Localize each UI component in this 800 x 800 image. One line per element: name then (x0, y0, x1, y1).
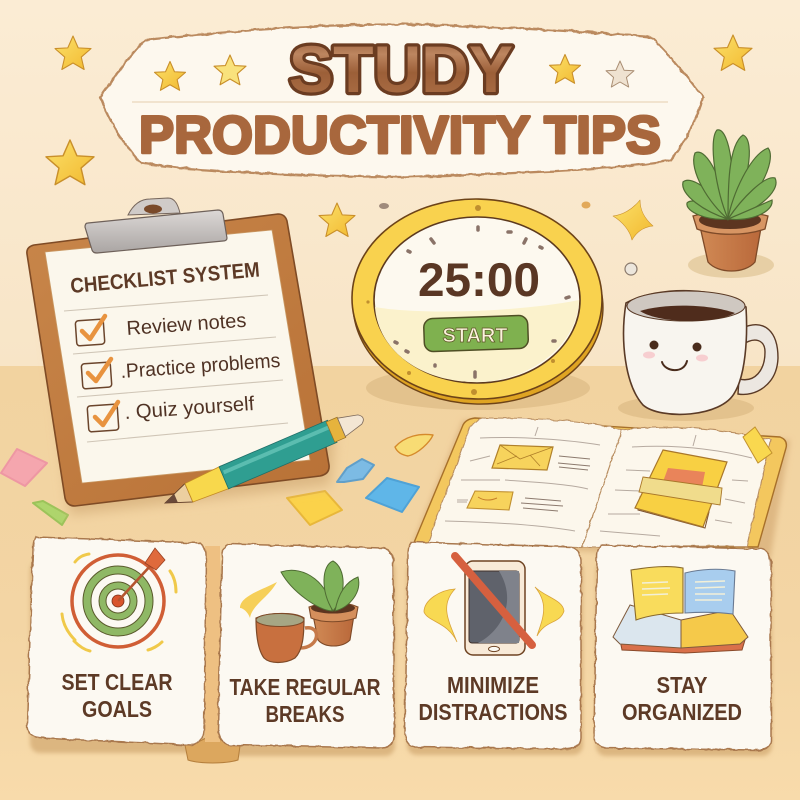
banner divider (132, 101, 668, 103)
icon: no bar (455, 556, 532, 645)
icon swooshes (62, 554, 176, 651)
rim dots (366, 205, 555, 395)
right page (582, 427, 770, 547)
pink note (1, 449, 47, 486)
card label: ORGANIZED (622, 699, 742, 725)
clock rim (350, 197, 604, 401)
card label (418, 672, 568, 725)
mug handle (738, 325, 778, 394)
card label: DISTRACTIONS (418, 699, 568, 725)
banner shape (100, 24, 703, 177)
clock ticks (395, 227, 569, 377)
pencil ferrule (326, 417, 346, 442)
plant (683, 130, 776, 278)
card label (230, 674, 381, 727)
icon: plant (281, 561, 359, 611)
icon: right vibration (535, 587, 564, 636)
card: minimize distractions (405, 542, 581, 749)
clipboard paper (45, 230, 310, 483)
card paper (594, 545, 771, 750)
pot soil (699, 211, 761, 229)
plant pot (699, 222, 762, 271)
envelope small (467, 491, 513, 510)
card paper (218, 544, 394, 748)
mug face (643, 340, 708, 370)
coffee mug (618, 291, 778, 421)
card label (622, 672, 742, 725)
item 2 (81, 350, 281, 389)
blue note (366, 478, 419, 512)
pencil lead (163, 494, 178, 507)
icon: target (72, 548, 165, 647)
notebook (413, 418, 790, 560)
icon: open book (613, 567, 748, 653)
item 2: .Practice problems (120, 350, 281, 383)
card: take regular breaks (218, 544, 394, 748)
pencil wood tip (161, 484, 193, 512)
clipboard shadow (45, 300, 335, 515)
mug shadow (618, 395, 754, 421)
icon: left vibration (424, 589, 457, 642)
gold chip (395, 434, 433, 456)
background wall (0, 0, 800, 366)
clip hole (144, 204, 162, 214)
item 3 (87, 393, 255, 432)
clipboard board (27, 214, 329, 506)
envelope large (492, 445, 553, 470)
timer digits: 25:00 (418, 253, 540, 306)
notebook shadow (413, 420, 790, 560)
title line 1: STUDY (289, 32, 513, 106)
planner booklet (635, 450, 727, 528)
card label: TAKE REGULAR (230, 674, 381, 700)
icon: cup (256, 614, 316, 662)
title banner (100, 24, 703, 177)
pencil yellow (184, 466, 230, 504)
plant shadow (688, 252, 774, 278)
gold tab (743, 427, 772, 463)
card paper (27, 537, 206, 745)
clock face lower tint (375, 300, 579, 382)
card: stay organized (594, 545, 771, 750)
pot rim (693, 212, 768, 234)
card: set clear goals (27, 537, 206, 745)
sticky notes (1, 434, 433, 525)
specks (379, 202, 637, 275)
clock face (374, 217, 580, 383)
card paper (405, 542, 581, 749)
card label: MINIMIZE (447, 672, 539, 698)
left page (427, 418, 622, 547)
card shadows (30, 560, 772, 756)
blue chip (337, 459, 374, 482)
icon swooshes (240, 582, 277, 618)
mug body (624, 291, 747, 414)
background table (0, 366, 800, 800)
mug inner (627, 291, 745, 321)
coffee (640, 306, 735, 321)
item 3: . Quiz yourself (124, 393, 255, 424)
icon: pot (309, 602, 358, 646)
pencil (160, 407, 368, 514)
tab between cards (185, 735, 240, 763)
green note (33, 501, 68, 525)
clipboard (27, 198, 335, 515)
title line 2: PRODUCTIVITY TIPS (139, 106, 661, 165)
timer clock (350, 197, 606, 410)
clock rim side (350, 204, 606, 408)
post between cards (205, 546, 220, 742)
card label: BREAKS (266, 701, 344, 727)
checklist rules (64, 295, 288, 442)
banner stars (154, 54, 634, 90)
icon: phone (465, 561, 525, 655)
decorative stars (46, 35, 752, 240)
notebook cover (413, 418, 786, 547)
checklist heading: CHECKLIST SYSTEM (69, 259, 261, 298)
clip top (128, 198, 180, 215)
card label: SET CLEAR (62, 669, 173, 695)
item 1 (75, 310, 247, 346)
pencil barrel (219, 420, 337, 489)
plant leaves (683, 130, 776, 220)
pencil eraser (338, 409, 367, 437)
clip plate (85, 210, 227, 253)
clock shadow (366, 366, 590, 410)
card label: STAY (656, 672, 708, 698)
yellow note (287, 491, 342, 525)
item 1: Review notes (126, 310, 247, 340)
card label (62, 669, 173, 722)
start button (423, 315, 529, 352)
page lines (445, 427, 752, 536)
start button: START (442, 325, 508, 347)
card label: GOALS (82, 696, 152, 722)
